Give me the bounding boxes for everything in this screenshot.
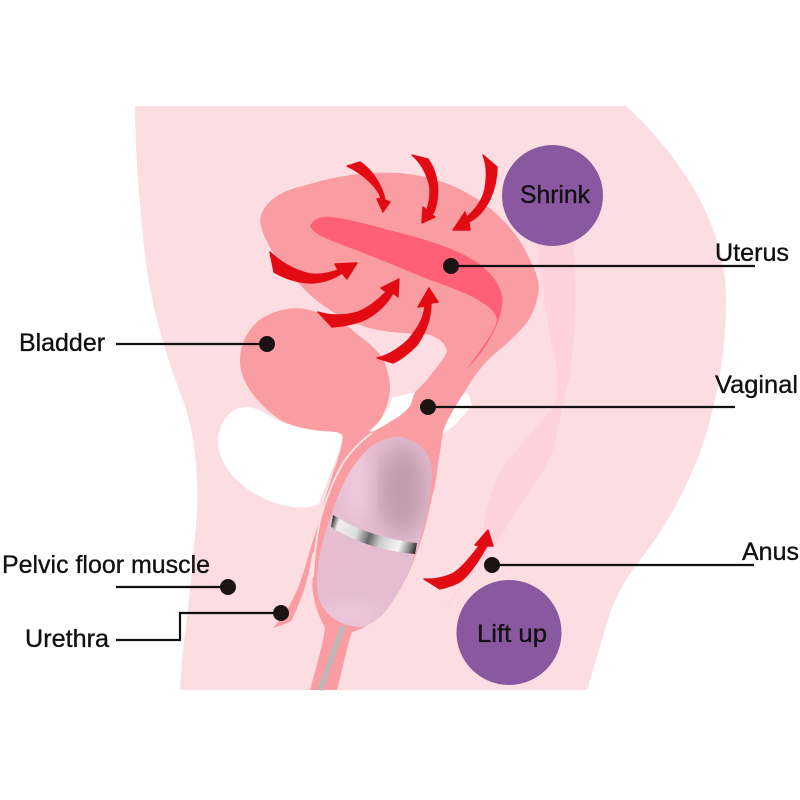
- bladder: [240, 308, 390, 438]
- label: Pelvic floor muscle: [2, 551, 236, 595]
- label: Bladder: Bladder: [19, 329, 105, 357]
- arrow: left: [270, 252, 357, 283]
- label: Uterus: [443, 239, 789, 274]
- label: Anus: [484, 538, 799, 573]
- arrows: contraction: [270, 155, 497, 589]
- arrow: lift up: [424, 530, 493, 589]
- metal band: [331, 515, 417, 554]
- label: Urethra: Urethra: [25, 625, 109, 653]
- label: Vaginal: [420, 371, 798, 415]
- pale line between urethra and canal: [313, 433, 372, 577]
- purple circle: Shrink: [502, 145, 603, 246]
- label: Anus: Anus: [742, 538, 799, 566]
- arrow: top middle: [412, 155, 438, 223]
- purple circle: Shrink: Shrink: [520, 181, 590, 209]
- arrow: lower right: [377, 288, 438, 363]
- white slivers beside vagina: [358, 392, 415, 444]
- purple circle: Lift up: Lift up: [477, 620, 547, 648]
- uterus and vagina: [260, 173, 539, 690]
- arrow: top right: [453, 155, 497, 230]
- label: Pelvic floor muscle: Pelvic floor muscle: [2, 551, 210, 579]
- uterine cavity: [310, 217, 502, 368]
- wire: [320, 626, 343, 690]
- urethra wall: [273, 430, 375, 628]
- label: Uterus: Uterus: [715, 239, 789, 267]
- rectum: [445, 240, 575, 608]
- body silhouette: [135, 106, 726, 690]
- label: Vaginal: Vaginal: [715, 371, 798, 399]
- vibrating egg: [317, 437, 432, 627]
- arrow: lower middle: [318, 279, 399, 327]
- label: Urethra: [25, 605, 289, 653]
- purple circle: Lift up: [456, 580, 562, 685]
- label: Bladder: [19, 329, 275, 357]
- arrow: top left: [347, 162, 390, 212]
- pelvic bone: white area: [218, 407, 342, 508]
